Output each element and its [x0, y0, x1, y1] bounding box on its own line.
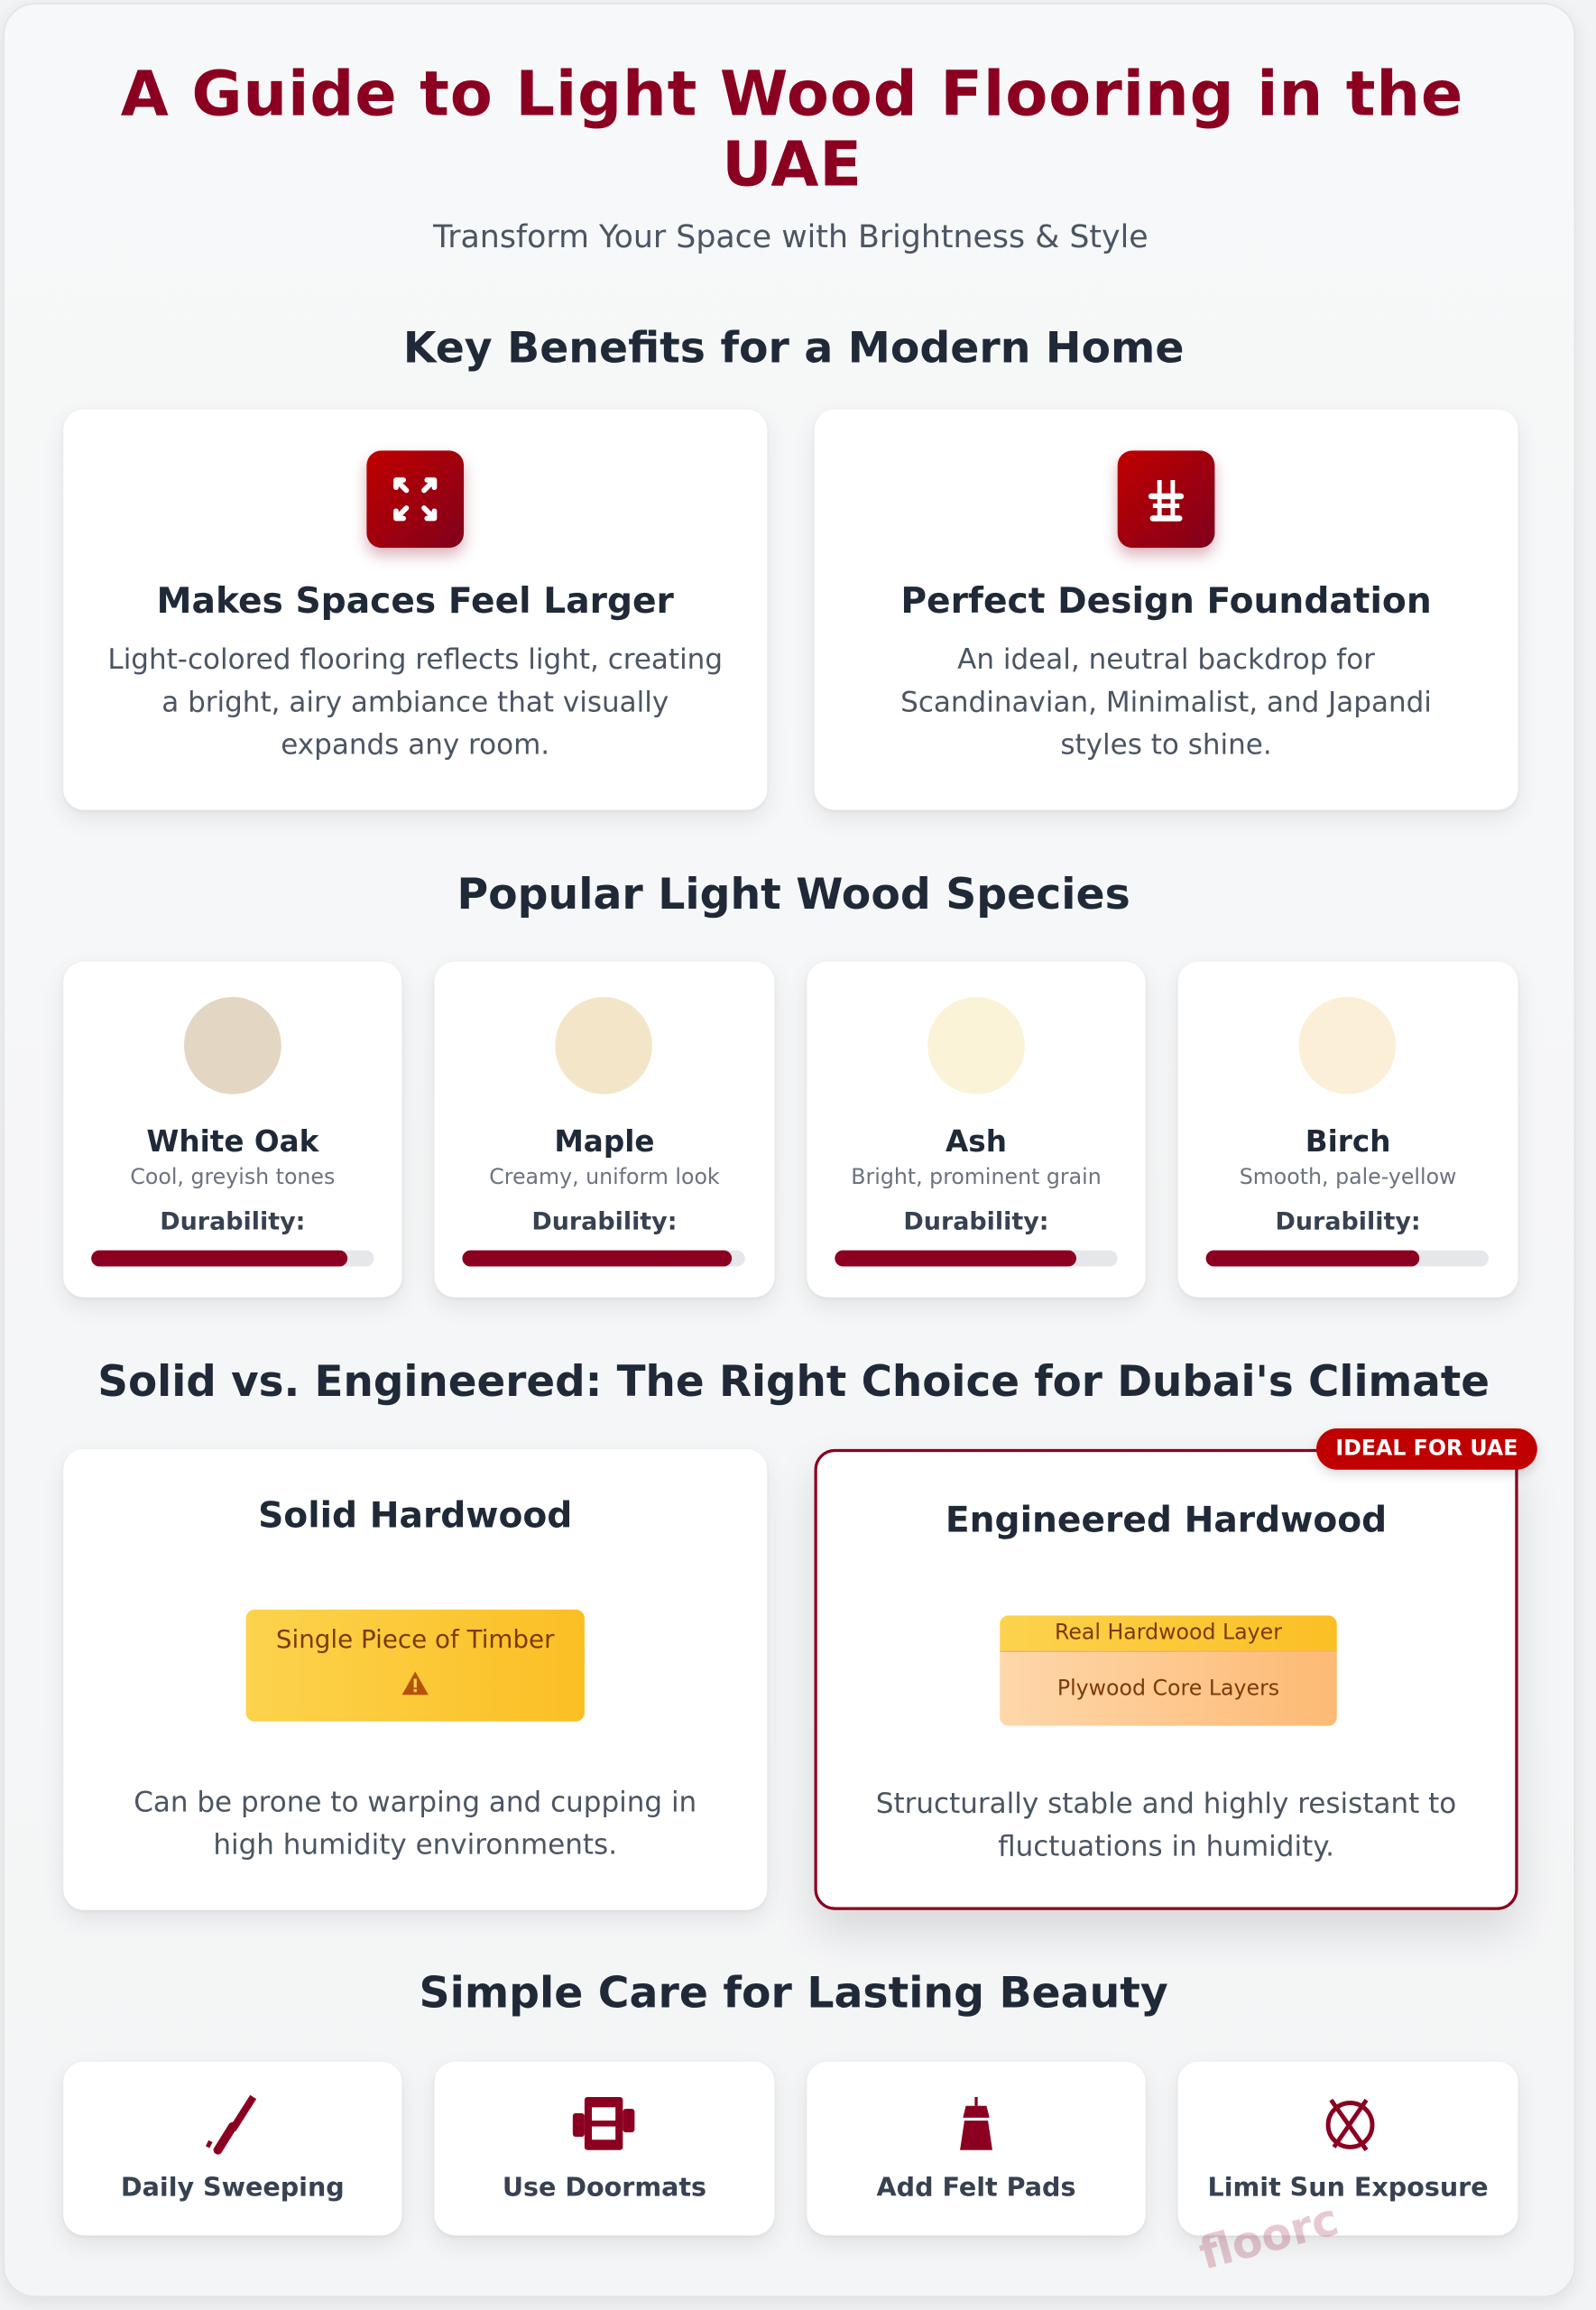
benefit text: An ideal, neutral backdrop for Scandinavian, Minimalist, and Japandi styles to shine. [900, 643, 1432, 762]
panel: maple [434, 962, 774, 1298]
label: Use Doormats [503, 2174, 706, 2203]
badge: ideal for uae [1316, 1428, 1537, 1470]
desc: Smooth, pale-yellow [1240, 1167, 1456, 1190]
icon: expand arrows [366, 450, 464, 548]
diagram: single piece [246, 1610, 585, 1722]
card title: Solid Hardwood [258, 1494, 572, 1536]
card text: Can be prone to warping and cupping in high humidity environments. [134, 1787, 697, 1862]
diagram: layers: Real Hardwood Layer [1055, 1622, 1282, 1645]
desc: Creamy, uniform look [489, 1167, 720, 1190]
icon: doormat [572, 2097, 635, 2150]
heading: care: Simple Care for Lasting Beauty [420, 1967, 1168, 2018]
card text: Structurally stable and highly resistant to fluctuations in humidity. [876, 1788, 1456, 1862]
icon: felt pad [960, 2097, 992, 2150]
desc: Bright, prominent grain [851, 1167, 1102, 1190]
panel: birch [1178, 962, 1518, 1298]
panel: engineered hardwood [814, 1449, 1518, 1910]
label: Daily Sweeping [121, 2174, 345, 2203]
desc: Cool, greyish tones [130, 1167, 335, 1190]
card title: Engineered Hardwood [946, 1499, 1387, 1540]
name: Birch [1305, 1123, 1390, 1159]
benefit title: Perfect Design Foundation [900, 580, 1432, 622]
bar [462, 1251, 745, 1267]
diagram: single piece: Single Piece of Timber [276, 1626, 555, 1655]
label: Limit Sun Exposure [1208, 2174, 1489, 2203]
name: White Oak [146, 1123, 318, 1159]
icon: broom [206, 2095, 256, 2155]
swatch [184, 997, 281, 1095]
heading: species: Popular Light Wood Species [457, 869, 1130, 919]
label: Durability: [160, 1207, 305, 1235]
bar [1206, 1251, 1489, 1267]
panel: daily sweeping [63, 2062, 402, 2235]
title: A Guide to Light Wood Flooring in the UAE [121, 58, 1463, 200]
label: Durability: [531, 1207, 677, 1235]
label: Durability: [1276, 1207, 1421, 1235]
bar [835, 1251, 1118, 1267]
label: Durability: [903, 1207, 1049, 1235]
icon: sun blocked [1326, 2099, 1375, 2151]
panel: solid hardwood [63, 1449, 767, 1910]
swatch [927, 997, 1025, 1095]
panel: ash [807, 962, 1146, 1298]
panel: perfect design foundation [814, 410, 1518, 810]
heading: solid vs engineered: Solid vs. Engineered: The Right Choice for Dubai's Climate [97, 1356, 1490, 1407]
panel: limit sun exposure [1178, 2062, 1518, 2235]
icon: warning [402, 1671, 429, 1695]
panel: doormats [434, 2062, 774, 2235]
swatch [555, 997, 652, 1095]
benefit title: Makes Spaces Feel Larger [157, 580, 674, 622]
watermark: floorc [1195, 2194, 1344, 2281]
diagram: layers: Plywood Core Layers [1057, 1677, 1279, 1701]
swatch [1298, 997, 1396, 1095]
name: Maple [554, 1123, 655, 1159]
label: Add Felt Pads [877, 2174, 1075, 2203]
icon: design [1118, 450, 1214, 548]
name: Ash [946, 1123, 1007, 1159]
panel: makes spaces feel larger [63, 410, 767, 810]
diagram: layers [1000, 1615, 1337, 1726]
subtitle: Transform Your Space with Brightness & Style [433, 219, 1149, 256]
bar [91, 1251, 374, 1267]
heading: key benefits: Key Benefits for a Modern Home [403, 322, 1184, 373]
panel: white oak [63, 962, 402, 1298]
badge: ideal for uae: IDEAL FOR UAE [1335, 1437, 1518, 1461]
panel: felt pads [807, 2062, 1146, 2235]
benefit text: Light-colored flooring reflects light, creating a bright, airy ambiance that visually expands any room. [107, 643, 723, 762]
